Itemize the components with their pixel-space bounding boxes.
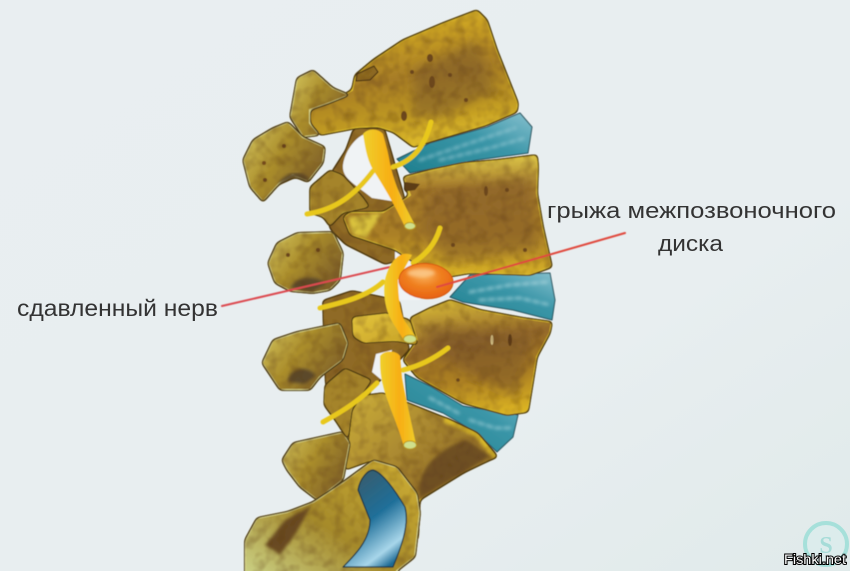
nerve root middle	[320, 228, 440, 343]
label: herniated disc: грыжа межпозвоночного	[547, 198, 836, 223]
upper spinous process	[243, 122, 325, 202]
lower spinous process	[282, 432, 350, 500]
label: compressed nerve: сдавленный нерв	[17, 295, 218, 321]
upper vertebra body	[310, 10, 518, 147]
facet joint	[310, 170, 370, 227]
lower lumbar vertebra	[345, 393, 497, 543]
facet joint, third level	[324, 368, 372, 440]
upper articular process	[290, 70, 350, 137]
nerve root top	[307, 122, 431, 230]
intervertebral disc 3	[405, 374, 518, 452]
spinal foramen openings	[343, 133, 420, 382]
intervertebral disc 1	[397, 113, 532, 173]
spine illustration	[222, 10, 625, 571]
lower spinous process, third level	[262, 323, 348, 390]
lower lamina	[352, 313, 418, 345]
label: herniated disc: диска	[658, 231, 724, 256]
pointer line: herniated disc	[437, 233, 625, 287]
middle spinous process	[268, 232, 343, 293]
label: herniated disc	[547, 198, 836, 256]
watermark text: Fishki.net	[784, 551, 846, 567]
watermark logo: S	[819, 533, 833, 559]
lower vertebra body	[403, 300, 552, 415]
intervertebral disc 2	[450, 273, 555, 320]
watermark logo	[805, 523, 847, 565]
middle vertebra body	[343, 155, 552, 277]
facet backing column	[318, 128, 420, 440]
pointer line: compressed nerve	[222, 267, 390, 306]
sacrum	[245, 460, 420, 571]
herniated disc	[398, 262, 454, 300]
sacral canal	[343, 470, 406, 567]
nerve root bottom	[323, 348, 448, 449]
